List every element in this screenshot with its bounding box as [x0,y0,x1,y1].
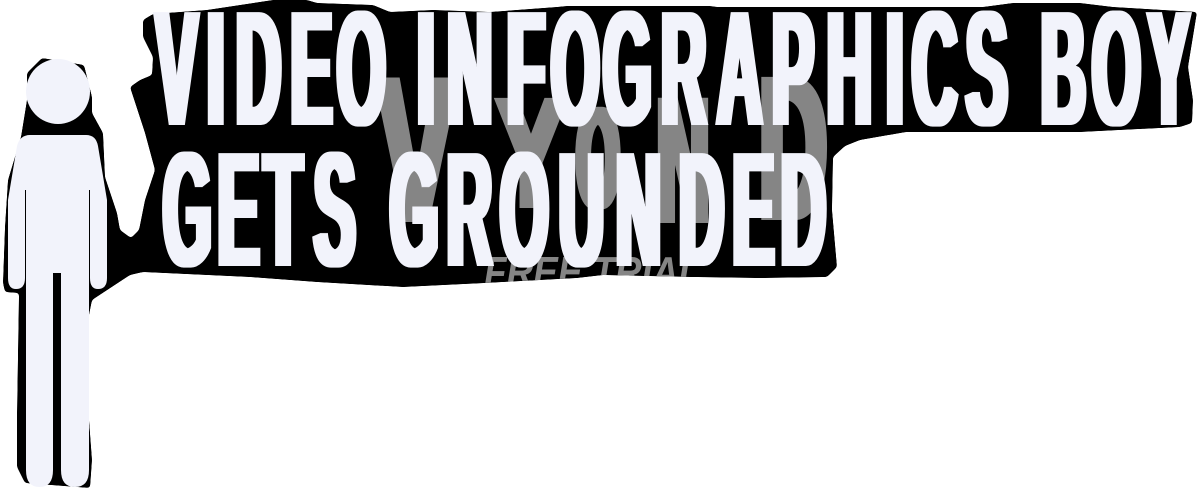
watermark: VYOND free trial: FREE TRIAL [484,248,701,297]
title [156,0,1190,302]
watermark: VYOND free trial: V [377,32,456,267]
watermark: VYOND free trial: N [657,58,709,262]
watermark: VYOND free trial: Y [496,63,566,242]
watermark: VYOND free trial: O [577,77,619,239]
icon: standing person [8,59,107,487]
infographic canvas: D [759,33,827,265]
title: GETS GROUNDED [163,119,826,302]
watermark: VYOND free trial [380,76,828,283]
body [8,135,107,487]
head [26,59,90,124]
